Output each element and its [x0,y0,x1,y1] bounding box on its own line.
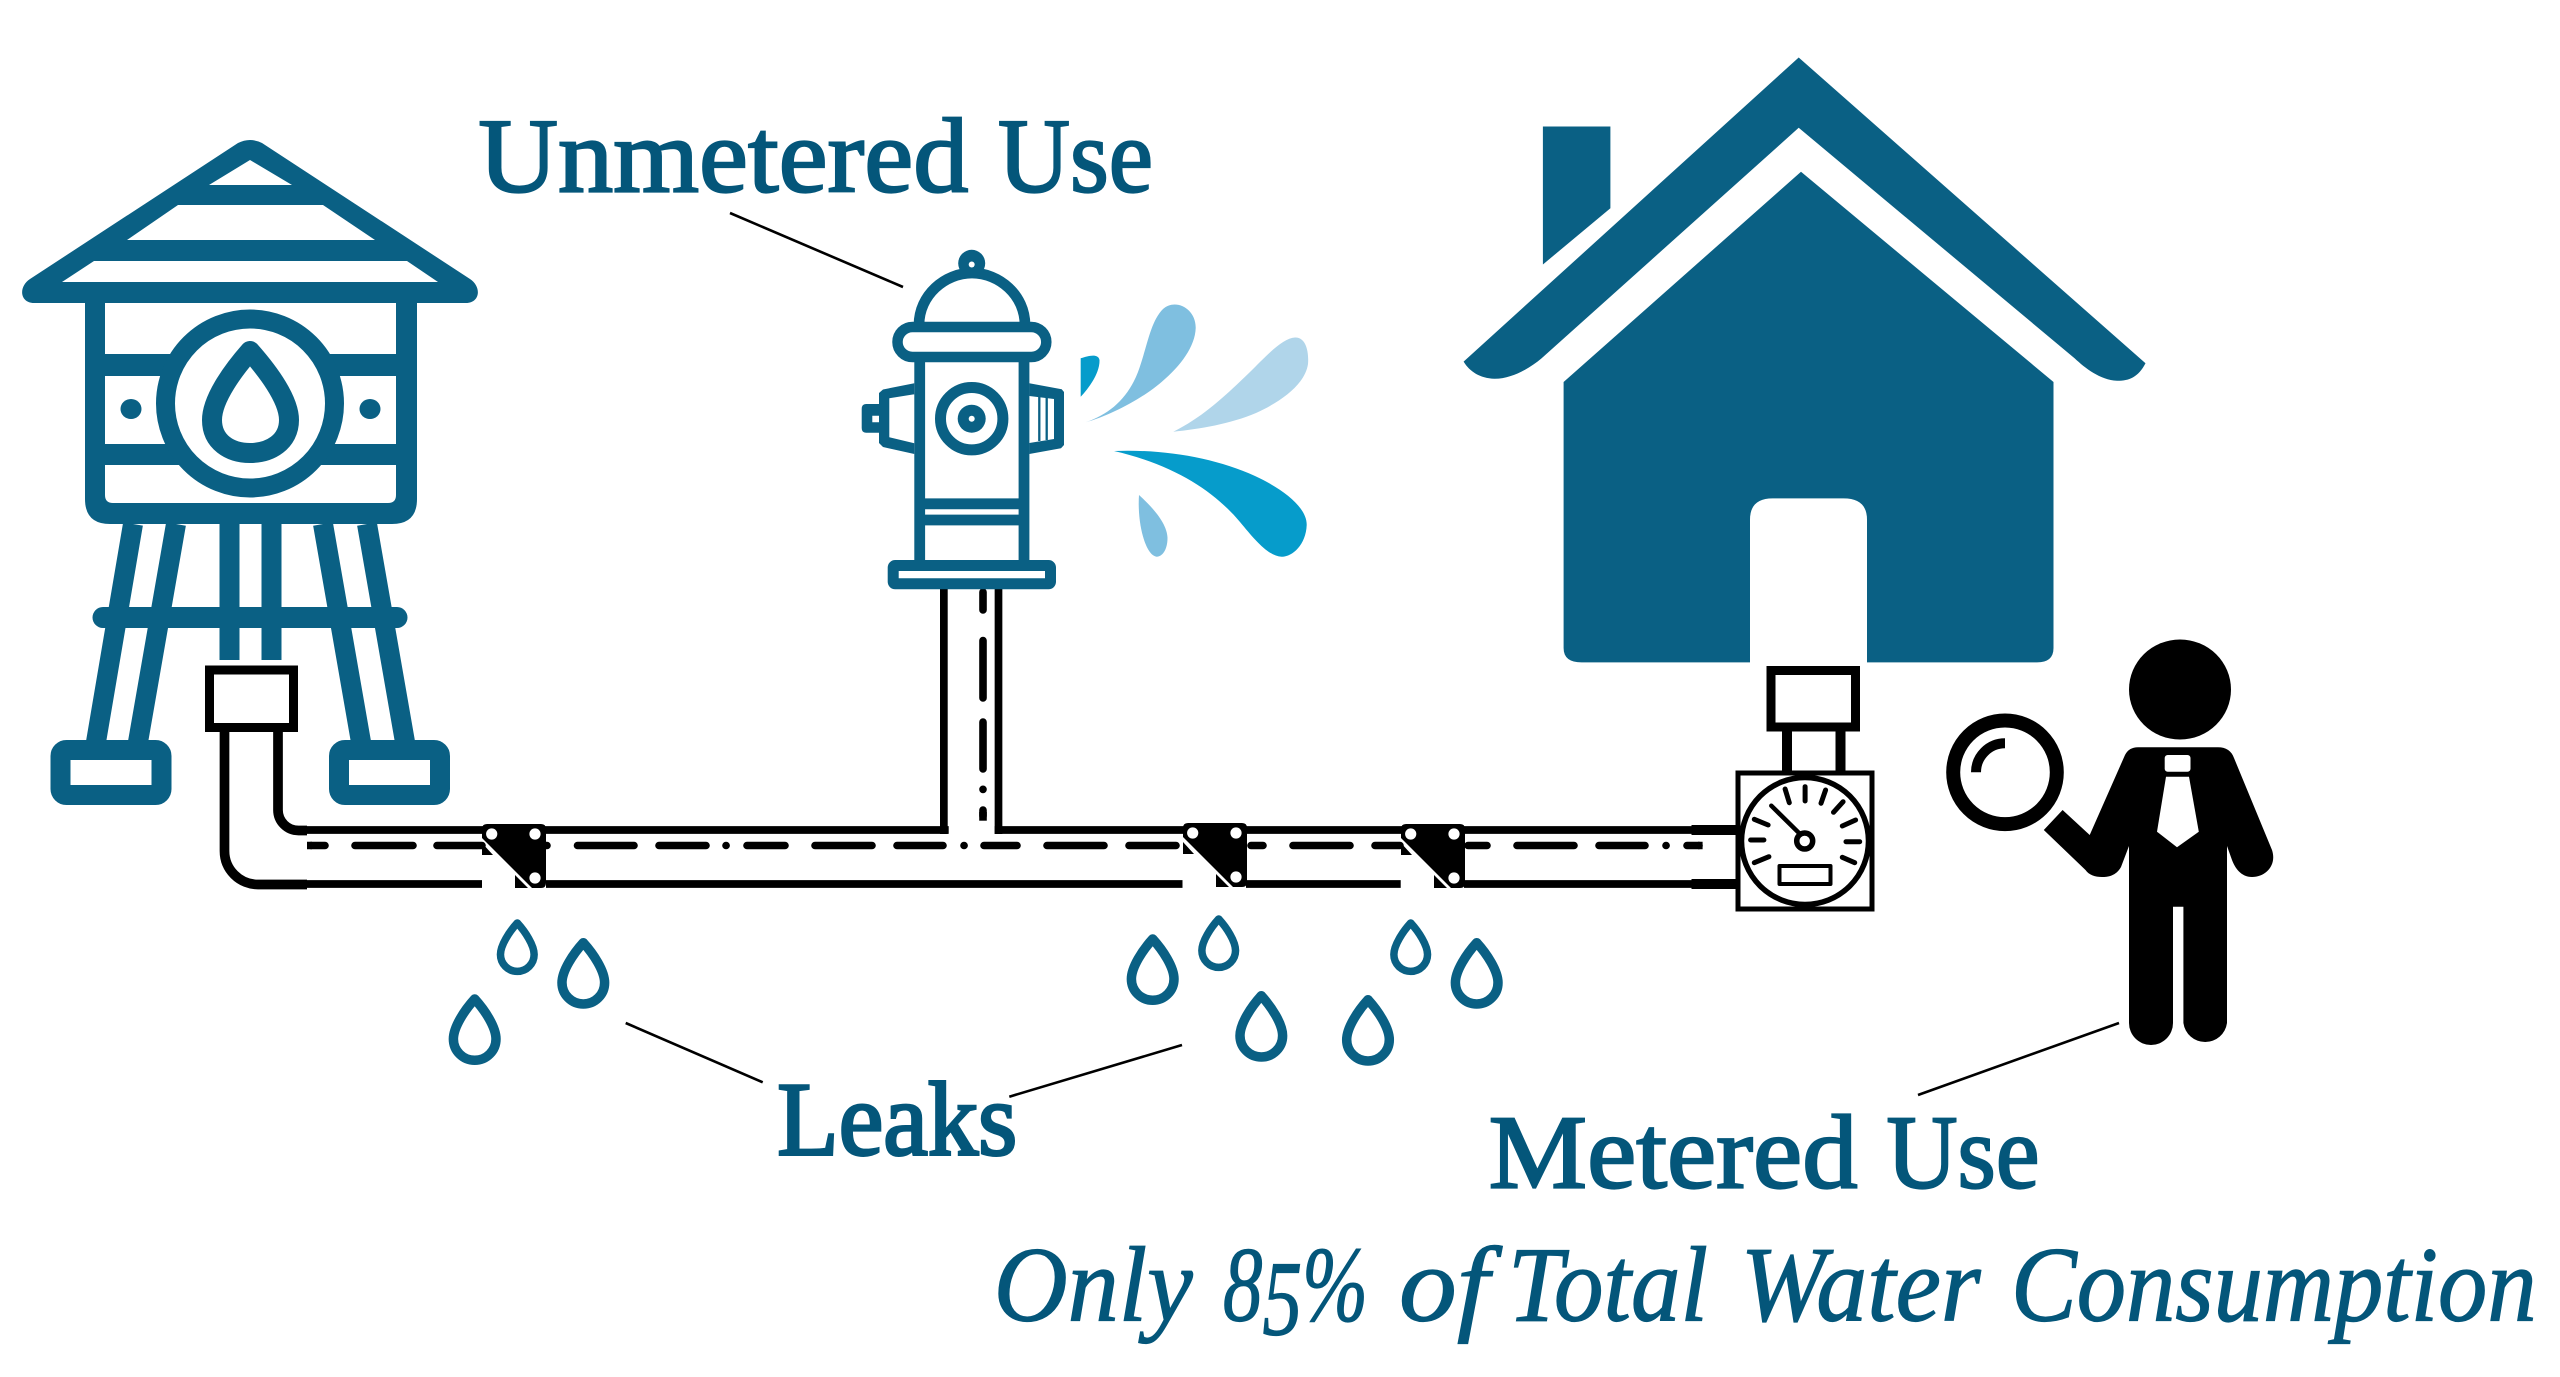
person body [2044,747,2273,1045]
tower legs [96,524,405,742]
magnifier lens [1953,720,2057,824]
hydrant left nozzle [862,383,914,454]
caption: 85 percent: of [1399,1227,1503,1345]
tower tank emblem ring [166,319,334,488]
valve 1 [482,824,546,888]
splash light [1173,337,1308,432]
meter housing [1738,773,1872,909]
water drops: leak group 2 [1131,919,1283,1057]
water drops: leak group 3 [1347,923,1498,1061]
house roof [1464,58,2146,381]
hydrant collar [898,327,1046,357]
heading: metered use: Metered [1489,1093,1858,1210]
riser centre line [979,592,987,821]
icon: water splash [1081,304,1308,557]
heading: metered use: Use [1886,1093,2040,1210]
hydrant base [893,566,1050,584]
hydrant cap knob [958,250,985,277]
meter stems [1787,731,1840,772]
tower rivets [120,399,380,419]
water drops: leak group 1 [453,923,605,1060]
tower tank [85,299,417,524]
caption: 85 percent: % [1302,1227,1368,1345]
heading: leaks: Leaks [777,1060,1017,1177]
meter ticks [1751,787,1860,863]
tower roof [22,140,478,303]
tower outlet box [210,670,294,728]
meter pipe stubs [1692,830,1737,884]
icon: water tower [22,140,478,795]
splash small top [1081,356,1100,397]
hydrant centre valve [940,388,1003,450]
hydrant riser walls [944,589,998,834]
icon: house [1464,58,2146,662]
tower outlet bends [224,731,307,884]
tower feet [60,750,440,795]
hydrant right nozzle [1029,383,1064,454]
tower water drop [212,351,289,453]
house body [1564,172,2054,662]
caption: 85 percent: Only [994,1227,1193,1345]
caption: 85 percent [994,1227,2537,1359]
caption: 85 percent: 5 [1263,1241,1302,1359]
meter display [1780,866,1830,884]
leader lines [626,213,2119,1097]
person collar [2165,755,2190,772]
caption: 85 percent: Total [1508,1227,1708,1345]
icon: water meter [1738,670,1872,909]
valve 2 [1183,823,1247,887]
heading: unmetered use [478,98,1153,215]
main pipe walls [307,830,1692,884]
splash bottom droplet [1139,495,1168,557]
hydrant dome [919,273,1025,325]
main pipe centre line [307,842,1703,849]
pipe network [210,589,1737,888]
hydrant body [920,360,1024,562]
valve 3 [1401,824,1465,888]
person head [2129,640,2231,740]
splash medium [1086,304,1196,422]
icon: fire hydrant [862,250,1064,584]
caption: 85 percent: Water [1741,1227,1981,1345]
heading: metered use [1489,1093,2040,1210]
meter top box [1771,670,1856,727]
heading: unmetered use: Unmetered [478,98,968,215]
house chimney [1543,126,1610,264]
meter dial [1742,778,1868,904]
splash large [1114,451,1307,557]
person tie [2157,777,2199,847]
heading: unmetered use: Use [998,98,1153,215]
caption: 85 percent: 8 [1223,1227,1276,1345]
icon: inspector person with magnifier [1953,640,2273,1045]
meter needle [1771,806,1813,849]
